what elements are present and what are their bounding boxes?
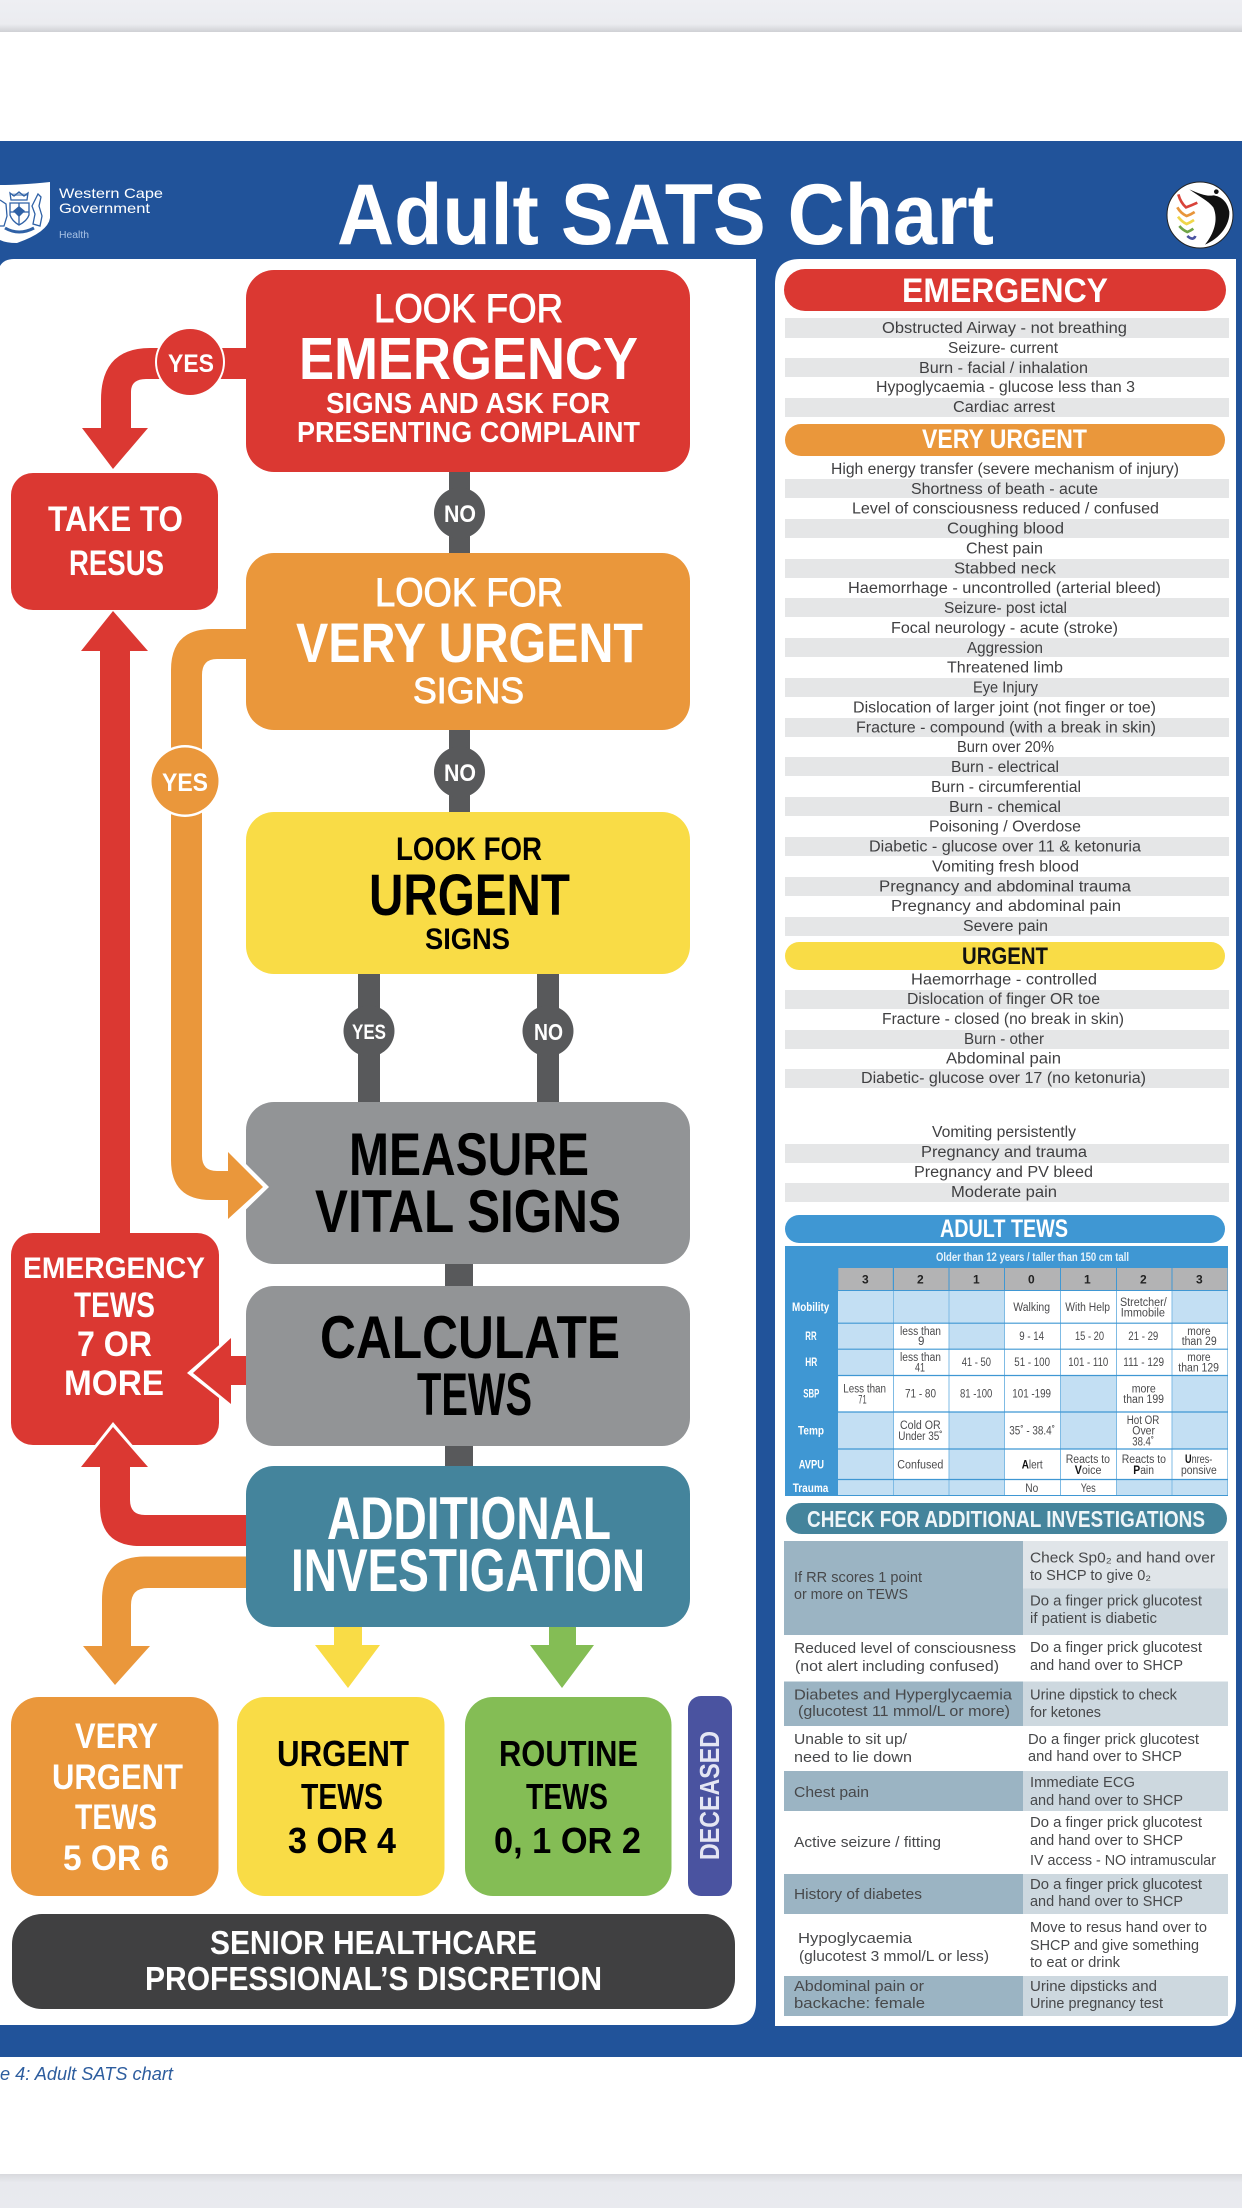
section: very urgent list: Diabetic - glucose over 11 & ketonuria — [869, 838, 1141, 856]
section: adult TEWS table: 81 -100 — [960, 1388, 992, 1400]
section: very urgent list: Chest pain — [966, 540, 1043, 558]
box: urgent TEWS 3 or 4: 3 OR 4 — [288, 1820, 396, 1861]
section: adult TEWS table: 111 - 129 — [1123, 1357, 1164, 1369]
box: additional investigation: INVESTIGATION — [291, 1537, 645, 1604]
box: look for urgent: URGENT — [369, 863, 570, 928]
section: urgent list: Moderate pain — [951, 1184, 1057, 1201]
box: additional investigation: ADDITIONAL — [327, 1485, 611, 1552]
badge: urgent yes — [344, 1006, 394, 1056]
section: adult TEWS table: than 199 — [1123, 1394, 1164, 1406]
section: additional investigations table: Move to resus hand over to — [1030, 1920, 1207, 1936]
caption: e 4: Adult SATS chart — [0, 2064, 174, 2084]
icon: SATS seal — [1167, 182, 1233, 248]
section: adult TEWS table: 35˚ - 38.4˚ — [1009, 1426, 1055, 1438]
section: emergency list — [784, 269, 1229, 417]
box: urgent TEWS 3 or 4: TEWS — [301, 1776, 383, 1817]
section: adult TEWS table: AVPU — [799, 1460, 824, 1472]
section: very urgent list — [785, 424, 1229, 936]
section: very urgent list: Focal neurology - acute (stroke) — [891, 620, 1118, 637]
section: very urgent list: Fracture - compound (with a break in skin) — [856, 719, 1156, 736]
section: additional investigations table: Do a finger prick glucotest — [1030, 1640, 1202, 1656]
section: urgent list — [785, 942, 1229, 1202]
logo wordmark: Western Cape — [59, 185, 163, 201]
heading: very urgent — [785, 424, 1225, 456]
section: adult TEWS table: more — [1132, 1384, 1156, 1396]
box: look for emergency — [246, 270, 690, 472]
section: adult TEWS table: less than — [900, 1352, 941, 1364]
box: take to resus: RESUS — [69, 544, 164, 583]
section: adult TEWS table: Confused — [897, 1460, 943, 1472]
section: additional investigations table: to eat or drink — [1030, 1955, 1121, 1971]
section: additional investigations table: (glucotest 11 mmol/L or more) — [798, 1704, 1010, 1720]
section: additional investigations table: and hand over to SHCP — [1030, 1658, 1183, 1674]
section: adult TEWS table: Yes — [1081, 1483, 1096, 1495]
section: adult TEWS table: 71 - 80 — [905, 1388, 936, 1400]
badge: very urgent no: NO — [444, 760, 476, 787]
section: additional investigations table: Do a finger prick glucotest — [1030, 1594, 1202, 1610]
section: adult TEWS table: 1 — [973, 1272, 980, 1286]
section: additional investigations table: Chest pain — [794, 1785, 869, 1801]
box: emergency TEWS 7 or more: MORE — [64, 1364, 164, 1403]
arrow: very urgent yes to vital signs — [171, 629, 269, 1227]
section: adult TEWS table: Reacts to — [1122, 1454, 1166, 1466]
box: emergency TEWS 7 or more — [11, 1233, 219, 1445]
badge: very urgent yes: YES — [162, 769, 208, 797]
badge: urgent no: NO — [534, 1019, 563, 1045]
section: additional investigations table: If RR scores 1 point — [794, 1570, 922, 1586]
box: take to resus — [11, 473, 218, 610]
section: adult TEWS table: 9 — [918, 1336, 924, 1348]
section: additional investigations table: Do a finger prick glucotest — [1030, 1877, 1202, 1893]
box: look for emergency: EMERGENCY — [299, 326, 638, 392]
logo wordmark — [59, 185, 163, 241]
box: routine TEWS 0, 1 or 2: TEWS — [526, 1776, 608, 1817]
section: additional investigations table: Abdominal pain or — [794, 1979, 924, 1995]
flowchart connectors — [358, 470, 559, 1468]
box: senior healthcare professional's discretion: SENIOR HEALTHCARE — [210, 1924, 537, 1961]
section: very urgent list: Level of consciousness reduced / confused — [852, 501, 1159, 518]
section: adult TEWS table: Temp — [798, 1426, 824, 1438]
box: look for emergency: LOOK FOR — [374, 287, 563, 331]
box: additional investigation — [246, 1466, 690, 1627]
badge: urgent yes: YES — [352, 1021, 386, 1044]
section: adult TEWS table: HR — [805, 1357, 818, 1369]
section: adult TEWS table: 15 - 20 — [1075, 1331, 1104, 1343]
section: additional investigations table: if patient is diabetic — [1030, 1611, 1157, 1627]
box: measure vital signs: MEASURE — [349, 1121, 589, 1188]
section: very urgent list: Burn over 20% — [957, 739, 1054, 756]
section: additional investigations table: Hypoglycaemia — [798, 1931, 913, 1947]
section: very urgent list: Aggression — [967, 640, 1043, 657]
section: emergency list: Burn - facial / inhalation — [919, 360, 1088, 377]
box: senior healthcare professional's discretion: PROFESSIONAL’S DISCRETION — [145, 1960, 602, 1997]
section: additional investigations table: SHCP and give something — [1030, 1938, 1199, 1954]
arrow: investigation to very urgent — [83, 1556, 246, 1685]
section: urgent list: Dislocation of finger OR toe — [907, 991, 1100, 1008]
box: routine TEWS 0, 1 or 2: ROUTINE — [499, 1733, 638, 1774]
section: emergency list: Hypoglycaemia - glucose less than 3 — [876, 379, 1135, 396]
logo: Western Cape Government — [0, 182, 163, 243]
section: additional investigations table: Check Sp0₂ and hand over — [1030, 1550, 1215, 1566]
section: adult TEWS table: 3 — [862, 1272, 869, 1286]
section: adult TEWS table: Alert — [1022, 1460, 1043, 1472]
section: very urgent list: Vomiting fresh blood — [932, 858, 1079, 875]
section: emergency list: Obstructed Airway - not breathing — [882, 320, 1127, 337]
section: adult TEWS table: 71 — [858, 1394, 867, 1406]
section: very urgent list: Burn - electrical — [951, 759, 1059, 776]
top grey band — [0, 0, 1242, 32]
box: very urgent TEWS 5 or 6: URGENT — [52, 1758, 183, 1797]
section: additional investigations table: Immediate ECG — [1030, 1775, 1135, 1791]
section: additional investigations table: Urine dipstick to check — [1030, 1688, 1178, 1704]
section: adult TEWS table: SBP — [803, 1388, 820, 1400]
arrow: investigation to urgent — [315, 1627, 380, 1688]
section: urgent list: Burn - other — [964, 1031, 1044, 1048]
section: adult TEWS table: 21 - 29 — [1128, 1331, 1158, 1343]
section: additional investigations table: need to lie down — [794, 1750, 912, 1766]
section: adult TEWS table: Under 35˚ — [898, 1431, 943, 1443]
section: additional investigations table: (glucotest 3 mmol/L or less) — [799, 1949, 989, 1965]
section: adult TEWS table: Stretcher/ — [1120, 1297, 1167, 1309]
section: very urgent list: Dislocation of larger joint (not finger or toe) — [853, 699, 1156, 716]
box: emergency TEWS 7 or more: TEWS — [74, 1286, 155, 1325]
section: very urgent list: Coughing blood — [947, 521, 1064, 538]
heading: adult TEWS — [785, 1215, 1225, 1243]
section: additional investigations table: Reduced level of consciousness — [794, 1641, 1016, 1657]
section: additional investigations table: and hand over to SHCP — [1030, 1793, 1183, 1809]
section: additional investigations table: Do a finger prick glucotest — [1028, 1732, 1199, 1748]
arrow: emergency TEWS up to resus — [81, 611, 148, 1233]
section: additional investigations table: to SHCP to give 0₂ — [1030, 1568, 1151, 1584]
heading: urgent: URGENT — [962, 943, 1048, 970]
section: adult TEWS table: Over — [1132, 1426, 1155, 1438]
box: look for urgent: LOOK FOR — [396, 831, 542, 867]
section: very urgent list: Eye Injury — [973, 680, 1038, 697]
section: urgent list: Diabetic- glucose over 17 (no ketonuria) — [861, 1070, 1146, 1087]
section: adult TEWS table: 9 - 14 — [1019, 1331, 1044, 1343]
section: adult TEWS table: Pain — [1133, 1465, 1154, 1477]
arrow: calculate to emergency TEWS — [187, 1333, 246, 1409]
box: deceased: DECEASED — [694, 1731, 725, 1860]
section: adult TEWS table: 3 — [1196, 1272, 1203, 1286]
box: routine TEWS 0, 1 or 2: 0, 1 OR 2 — [494, 1820, 641, 1861]
section: additional investigations table: or more on TEWS — [794, 1587, 908, 1603]
section: additional investigations table: Diabetes and Hyperglycaemia — [794, 1688, 1013, 1704]
section: adult TEWS table: Mobility — [792, 1302, 830, 1314]
box: calculate TEWS — [246, 1286, 690, 1446]
section: very urgent list: Pregnancy and abdominal pain — [891, 898, 1121, 915]
box: urgent TEWS 3 or 4 — [237, 1697, 444, 1896]
badge: very urgent yes — [149, 745, 221, 817]
section: adult TEWS table: 2 — [1140, 1272, 1147, 1286]
heading: very urgent: VERY URGENT — [922, 424, 1087, 454]
section: adult TEWS table: 2 — [917, 1272, 924, 1286]
section: very urgent list: Shortness of beath - acute — [911, 481, 1098, 498]
section: additional investigations table: and hand over to SHCP — [1030, 1833, 1183, 1849]
section: adult TEWS table: than 29 — [1182, 1336, 1217, 1348]
title: Adult SATS Chart — [337, 167, 994, 263]
section: very urgent list: Haemorrhage - uncontrolled (arterial bleed) — [848, 580, 1161, 597]
section: very urgent list: Burn - circumferential — [931, 779, 1081, 796]
section: adult TEWS table: Unres- — [1185, 1454, 1212, 1466]
box: very urgent TEWS 5 or 6 — [11, 1697, 218, 1896]
section: additional investigations table: History of diabetes — [794, 1887, 922, 1903]
badge: emergency no — [434, 488, 485, 538]
section: additional investigations table: Do a finger prick glucotest — [1030, 1815, 1202, 1831]
box: urgent TEWS 3 or 4: URGENT — [277, 1733, 409, 1774]
panel: triage lists — [775, 259, 1236, 2026]
arrow: investigation to routine — [530, 1627, 594, 1688]
section: urgent list: Abdominal pain — [946, 1050, 1061, 1068]
box: take to resus: TAKE TO — [48, 500, 183, 539]
section: additional investigations table: Urine pregnancy test — [1030, 1996, 1163, 2012]
section: adult TEWS table: 41 — [915, 1362, 925, 1374]
box: look for very urgent — [246, 553, 690, 730]
box: look for urgent: SIGNS — [425, 923, 510, 956]
box: measure vital signs: VITAL SIGNS — [315, 1178, 621, 1245]
section: additional investigations table: and hand over to SHCP — [1030, 1894, 1183, 1910]
heading: emergency — [784, 269, 1226, 311]
section: very urgent list: Threatened limb — [947, 660, 1063, 677]
section: additional investigations table: for ketones — [1030, 1705, 1101, 1721]
section: additional investigations table: IV access - NO intramuscular — [1030, 1853, 1216, 1869]
section: adult TEWS table: more — [1187, 1326, 1211, 1338]
arrow: emergency yes to resus — [82, 348, 246, 469]
section: adult TEWS table: 41 - 50 — [962, 1357, 991, 1369]
section: adult TEWS table: 1 — [1084, 1272, 1091, 1286]
box: routine TEWS 0, 1 or 2 — [465, 1697, 672, 1896]
box: calculate TEWS: TEWS — [417, 1361, 532, 1428]
section: urgent list: Pregnancy and PV bleed — [914, 1164, 1093, 1181]
section: additional investigations table: Active seizure / fitting — [794, 1835, 941, 1851]
section: very urgent list: Severe pain — [963, 918, 1048, 935]
section: adult TEWS table: Less than — [843, 1384, 886, 1396]
section: adult TEWS table: 51 - 100 — [1014, 1357, 1050, 1369]
section: very urgent list: Poisoning / Overdose — [929, 819, 1081, 836]
logo wordmark: Government — [59, 200, 150, 216]
box: measure vital signs — [246, 1102, 690, 1264]
section: adult TEWS table: RR — [805, 1331, 817, 1343]
section: very urgent list: Burn - chemical — [949, 799, 1061, 816]
section: additional investigations table: (not alert including confused) — [795, 1659, 999, 1675]
section: adult TEWS table — [785, 1215, 1228, 1496]
arrow: investigation up to emergency TEWS — [76, 1422, 246, 1546]
bottom grey band — [0, 2174, 1242, 2208]
section: adult TEWS table: Immobile — [1121, 1308, 1165, 1320]
section: urgent list: Pregnancy and trauma — [921, 1144, 1087, 1161]
section: adult TEWS table: Hot OR — [1127, 1415, 1159, 1427]
box: look for emergency: SIGNS AND ASK FOR — [326, 388, 610, 420]
badge: emergency yes — [155, 327, 225, 397]
section: adult TEWS table: ponsive — [1181, 1465, 1217, 1477]
section: adult TEWS table: 38.4˚ — [1132, 1436, 1154, 1448]
section: very urgent list: Pregnancy and abdominal trauma — [879, 878, 1131, 895]
box: look for emergency: PRESENTING COMPLAINT — [297, 417, 640, 449]
section: additional investigations table: backache: female — [794, 1996, 925, 2012]
section: very urgent list: High energy transfer (severe mechanism of injury) — [831, 461, 1179, 478]
box: senior healthcare professional's discretion — [12, 1914, 735, 2009]
section: emergency list: Cardiac arrest — [953, 399, 1056, 416]
section: very urgent list: Seizure- post ictal — [944, 600, 1067, 617]
section: adult TEWS table: Older than 12 years / taller than 150 cm tall — [936, 1250, 1129, 1264]
section: adult TEWS table: 101 - 110 — [1068, 1357, 1108, 1369]
section: additional investigations table: Urine dipsticks and — [1030, 1979, 1157, 1995]
section: adult TEWS table: No — [1025, 1483, 1038, 1495]
badge: emergency yes: YES — [168, 350, 214, 378]
section: additional investigations table: and hand over to SHCP — [1028, 1749, 1182, 1765]
badge: emergency no: NO — [444, 501, 476, 528]
panel: flowchart — [0, 259, 756, 2025]
box: look for very urgent: VERY URGENT — [296, 611, 643, 674]
section: additional investigations table — [784, 1503, 1228, 2016]
box: very urgent TEWS 5 or 6: 5 OR 6 — [63, 1839, 169, 1878]
section: additional investigations table: Unable to sit up/ — [794, 1732, 908, 1748]
section: adult TEWS table: With Help — [1065, 1302, 1110, 1314]
logo wordmark: Health — [59, 230, 89, 241]
badge: very urgent no — [434, 746, 485, 798]
section: adult TEWS table: less than — [900, 1326, 941, 1338]
heading: adult TEWS: ADULT TEWS — [940, 1215, 1068, 1243]
section: adult TEWS table: Voice — [1075, 1465, 1101, 1477]
box: deceased — [688, 1696, 732, 1896]
box: look for urgent — [246, 812, 690, 974]
section: adult TEWS table: Trauma — [793, 1483, 829, 1495]
section: adult TEWS table: more — [1187, 1352, 1211, 1364]
section: adult TEWS table: Walking — [1013, 1302, 1050, 1314]
heading: urgent — [785, 942, 1225, 970]
section: very urgent list: Stabbed neck — [954, 560, 1056, 577]
section: adult TEWS table: 0 — [1028, 1272, 1035, 1286]
section: emergency list: Seizure- current — [948, 340, 1059, 357]
section: urgent list: Vomiting persistently — [932, 1124, 1076, 1141]
box: emergency TEWS 7 or more: 7 OR — [77, 1325, 152, 1364]
section: adult TEWS table: than 129 — [1178, 1362, 1219, 1374]
box: very urgent TEWS 5 or 6: TEWS — [75, 1798, 157, 1837]
section: adult TEWS table: Cold OR — [900, 1420, 941, 1432]
section: urgent list: Haemorrhage - controlled — [911, 972, 1097, 988]
section: adult TEWS table: 101 -199 — [1012, 1388, 1051, 1400]
section: urgent list: Fracture - closed (no break in skin) — [882, 1011, 1124, 1028]
box: emergency TEWS 7 or more: EMERGENCY — [23, 1252, 205, 1285]
badge: urgent no — [522, 1006, 574, 1056]
section: adult TEWS table: Reacts to — [1066, 1454, 1110, 1466]
heading: emergency: EMERGENCY — [902, 272, 1108, 310]
box: look for very urgent: LOOK FOR — [375, 571, 563, 615]
box: very urgent TEWS 5 or 6: VERY — [75, 1717, 158, 1756]
box: look for very urgent: SIGNS — [413, 670, 524, 711]
box: calculate TEWS: CALCULATE — [320, 1304, 620, 1371]
